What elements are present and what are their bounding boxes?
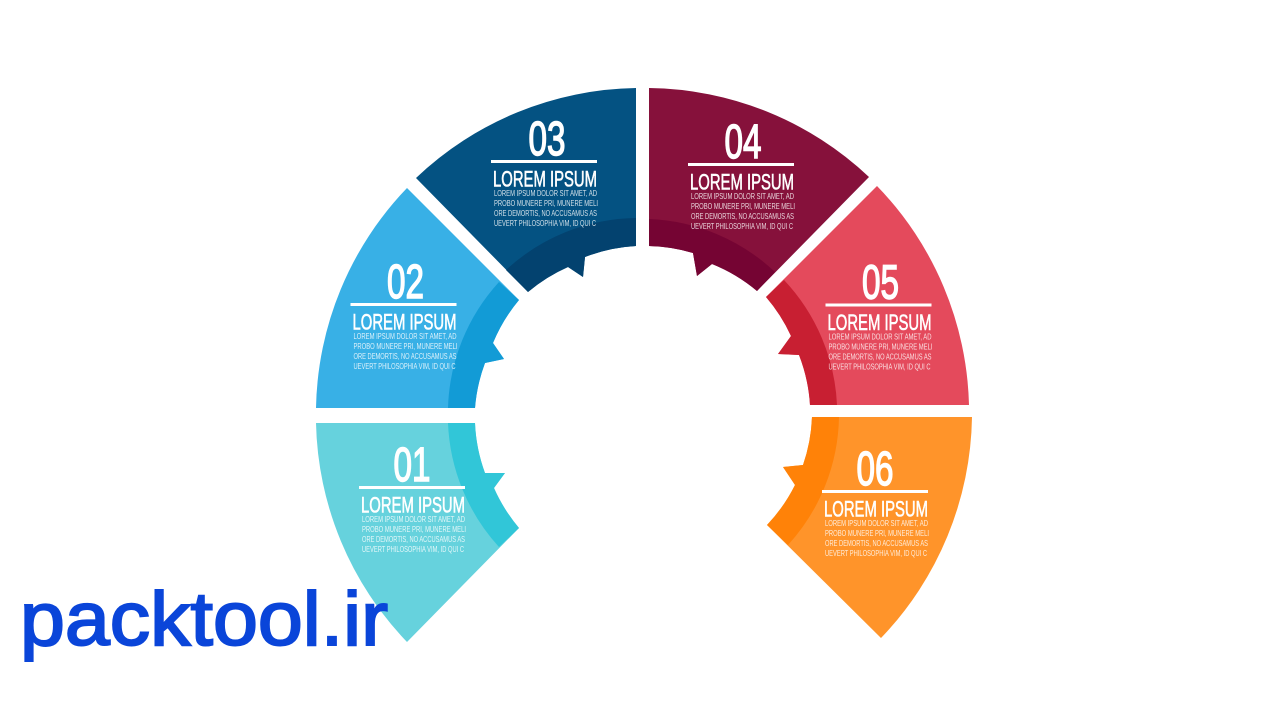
text block: 03 xyxy=(491,113,598,228)
segment 01 xyxy=(316,423,519,642)
body text 05: ORE DEMORTIS, NO ACCUSAMUS AS xyxy=(828,352,932,362)
rule 04 xyxy=(688,163,794,166)
segment 06 xyxy=(767,417,972,638)
heading 01: LOREM IPSUM xyxy=(361,492,465,518)
panel: segment 02 base xyxy=(316,188,519,408)
rule 03 xyxy=(491,160,597,163)
text block: 05 xyxy=(826,256,932,372)
body text 01: UEVERT PHILOSOPHIA VIM, ID QUI C xyxy=(362,544,464,554)
segment 02 xyxy=(316,188,519,408)
body text 05: UEVERT PHILOSOPHIA VIM, ID QUI C xyxy=(828,362,930,372)
number 06: 06 xyxy=(856,443,894,496)
body text 02 xyxy=(354,331,458,371)
panel: segment 05 base xyxy=(766,186,969,405)
rule 06 xyxy=(822,490,928,493)
body text 01: PROBO MUNERE PRI, MUNERE MELI xyxy=(362,524,466,534)
panel: segment 06 base xyxy=(767,417,972,638)
body text 06 xyxy=(825,518,929,558)
heading 05: LOREM IPSUM xyxy=(828,310,932,335)
body text 04: LOREM IPSUM DOLOR SIT AMET, AD xyxy=(691,191,794,201)
body text 04 xyxy=(691,191,795,231)
watermark: packtool.ir: packtool.ir xyxy=(20,577,388,662)
text block: 04 xyxy=(688,116,795,231)
number 04: 04 xyxy=(724,116,762,169)
heading 03: LOREM IPSUM xyxy=(493,166,597,192)
body text 05: PROBO MUNERE PRI, MUNERE MELI xyxy=(828,342,932,352)
number 01: 01 xyxy=(394,439,430,492)
segment 05 xyxy=(766,186,969,405)
body text 02: LOREM IPSUM DOLOR SIT AMET, AD xyxy=(354,331,456,341)
panel: segment 03 base xyxy=(416,88,636,292)
panel: segment 05 inner band xyxy=(766,280,837,405)
panel: segment 01 inner band xyxy=(448,423,519,547)
heading 02: LOREM IPSUM xyxy=(352,310,456,334)
body text 01: ORE DEMORTIS, NO ACCUSAMUS AS xyxy=(362,534,465,544)
panel: segment 06 inner band xyxy=(767,417,839,545)
body text 06: ORE DEMORTIS, NO ACCUSAMUS AS xyxy=(825,538,928,548)
body text 04: ORE DEMORTIS, NO ACCUSAMUS AS xyxy=(691,211,794,221)
segment 03 xyxy=(416,88,636,292)
text block: 01 xyxy=(359,439,466,554)
heading 04: LOREM IPSUM xyxy=(690,170,794,194)
panel: segment 01 base xyxy=(316,423,519,642)
body text 06: UEVERT PHILOSOPHIA VIM, ID QUI C xyxy=(825,548,927,558)
body text 06: LOREM IPSUM DOLOR SIT AMET, AD xyxy=(825,518,928,528)
body text 03: PROBO MUNERE PRI, MUNERE MELI xyxy=(494,198,598,208)
number 05: 05 xyxy=(862,256,899,310)
body text 03 xyxy=(494,188,598,228)
body text 03: UEVERT PHILOSOPHIA VIM, ID QUI C xyxy=(494,218,596,228)
body text 05: LOREM IPSUM DOLOR SIT AMET, AD xyxy=(828,332,932,342)
body text 03: LOREM IPSUM DOLOR SIT AMET, AD xyxy=(494,188,597,198)
body text 02: ORE DEMORTIS, NO ACCUSAMUS AS xyxy=(354,351,457,361)
panel: segment 02 inner band xyxy=(448,282,519,408)
panel: segment 04 inner band xyxy=(649,219,775,291)
body text 03: ORE DEMORTIS, NO ACCUSAMUS AS xyxy=(494,208,597,218)
panel: segment 04 base xyxy=(649,88,869,291)
text block: 02 xyxy=(350,256,458,371)
body text 02: UEVERT PHILOSOPHIA VIM, ID QUI C xyxy=(354,361,456,371)
heading 06: LOREM IPSUM xyxy=(824,496,928,522)
number 02: 02 xyxy=(387,256,424,309)
rule 05 xyxy=(826,304,932,306)
number 03: 03 xyxy=(528,113,566,166)
body text 04: UEVERT PHILOSOPHIA VIM, ID QUI C xyxy=(691,221,793,231)
rule 01 xyxy=(359,486,465,489)
segment 04 xyxy=(649,88,869,291)
text block: 06 xyxy=(822,443,929,558)
panel: segment 03 inner band xyxy=(506,218,636,292)
body text 02: PROBO MUNERE PRI, MUNERE MELI xyxy=(354,341,458,351)
body text 06: PROBO MUNERE PRI, MUNERE MELI xyxy=(825,528,929,538)
body text 05 xyxy=(828,332,932,372)
body text 01 xyxy=(362,514,466,554)
body text 04: PROBO MUNERE PRI, MUNERE MELI xyxy=(691,201,795,211)
body text 01: LOREM IPSUM DOLOR SIT AMET, AD xyxy=(362,514,465,524)
rule 02 xyxy=(350,303,456,306)
